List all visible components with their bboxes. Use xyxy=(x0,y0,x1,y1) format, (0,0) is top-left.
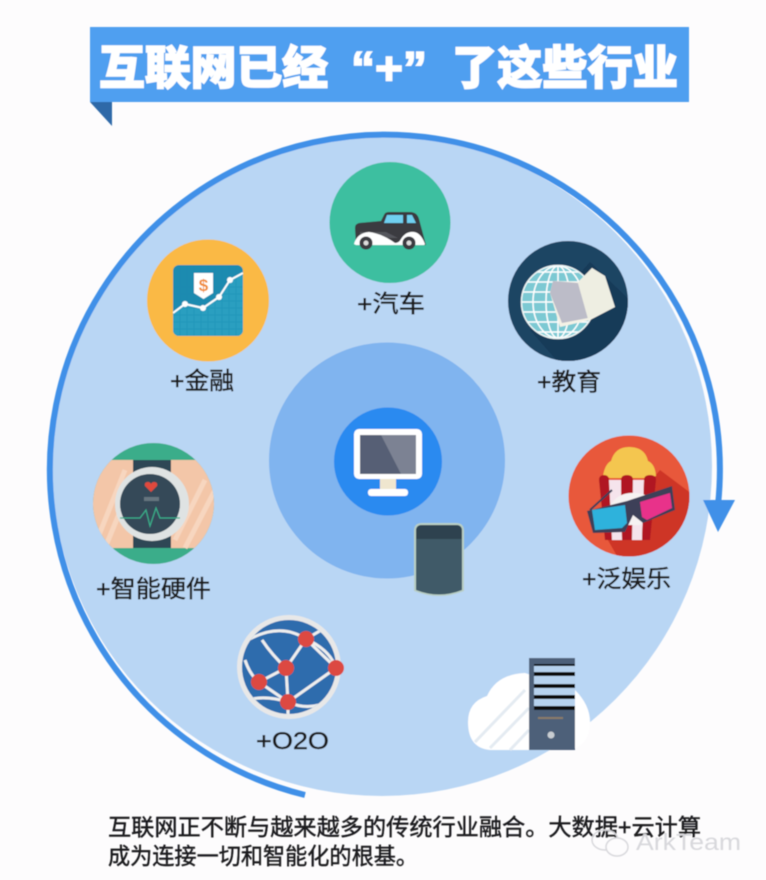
icon: car xyxy=(354,212,426,250)
label: entertainment: +泛娱乐 xyxy=(582,566,671,593)
node: smart hardware xyxy=(90,443,220,603)
title text: 了这些行业 xyxy=(452,42,678,94)
caption text: 互联网正不断与越来越多的传统行业融合。大数据+云计算 xyxy=(108,814,701,840)
icon: smartphone xyxy=(414,523,464,596)
center circle with monitor xyxy=(269,342,505,578)
icon: globe and book xyxy=(520,264,615,340)
title text: “+” xyxy=(351,42,427,94)
icon: popcorn and 3D glasses xyxy=(587,447,675,540)
watermark: ArkTeam: ArkTeam xyxy=(636,829,741,855)
label: smart hardware: +智能硬件 xyxy=(96,576,211,603)
node: entertainment xyxy=(568,436,700,593)
title text: 互联网已经 xyxy=(99,42,328,94)
label: automobile: +汽车 xyxy=(357,291,425,318)
icon: finance chart xyxy=(173,265,243,336)
watermark: ArkTeam xyxy=(592,829,741,856)
icon: finance chart: $ xyxy=(199,276,209,295)
icon: network globe xyxy=(245,625,344,720)
label: finance: +金融 xyxy=(170,368,234,395)
title banner xyxy=(90,27,689,126)
node: automobile xyxy=(330,162,450,318)
node: O2O xyxy=(237,615,344,755)
node: finance xyxy=(147,240,269,395)
icon: monitor xyxy=(354,429,422,496)
node: education xyxy=(508,241,640,396)
label: O2O: +O2O xyxy=(256,728,329,755)
banner fold xyxy=(90,102,112,126)
title text xyxy=(99,42,678,94)
caption text xyxy=(108,814,701,869)
panel: large circular disc xyxy=(52,136,712,796)
label: education: +教育 xyxy=(537,369,601,396)
icon: cloud with server xyxy=(468,658,590,750)
icon: smartwatch xyxy=(90,460,220,548)
caption text: 成为连接一切和智能化的根基。 xyxy=(108,843,418,869)
arrow: circular arc with arrowhead xyxy=(50,135,735,795)
